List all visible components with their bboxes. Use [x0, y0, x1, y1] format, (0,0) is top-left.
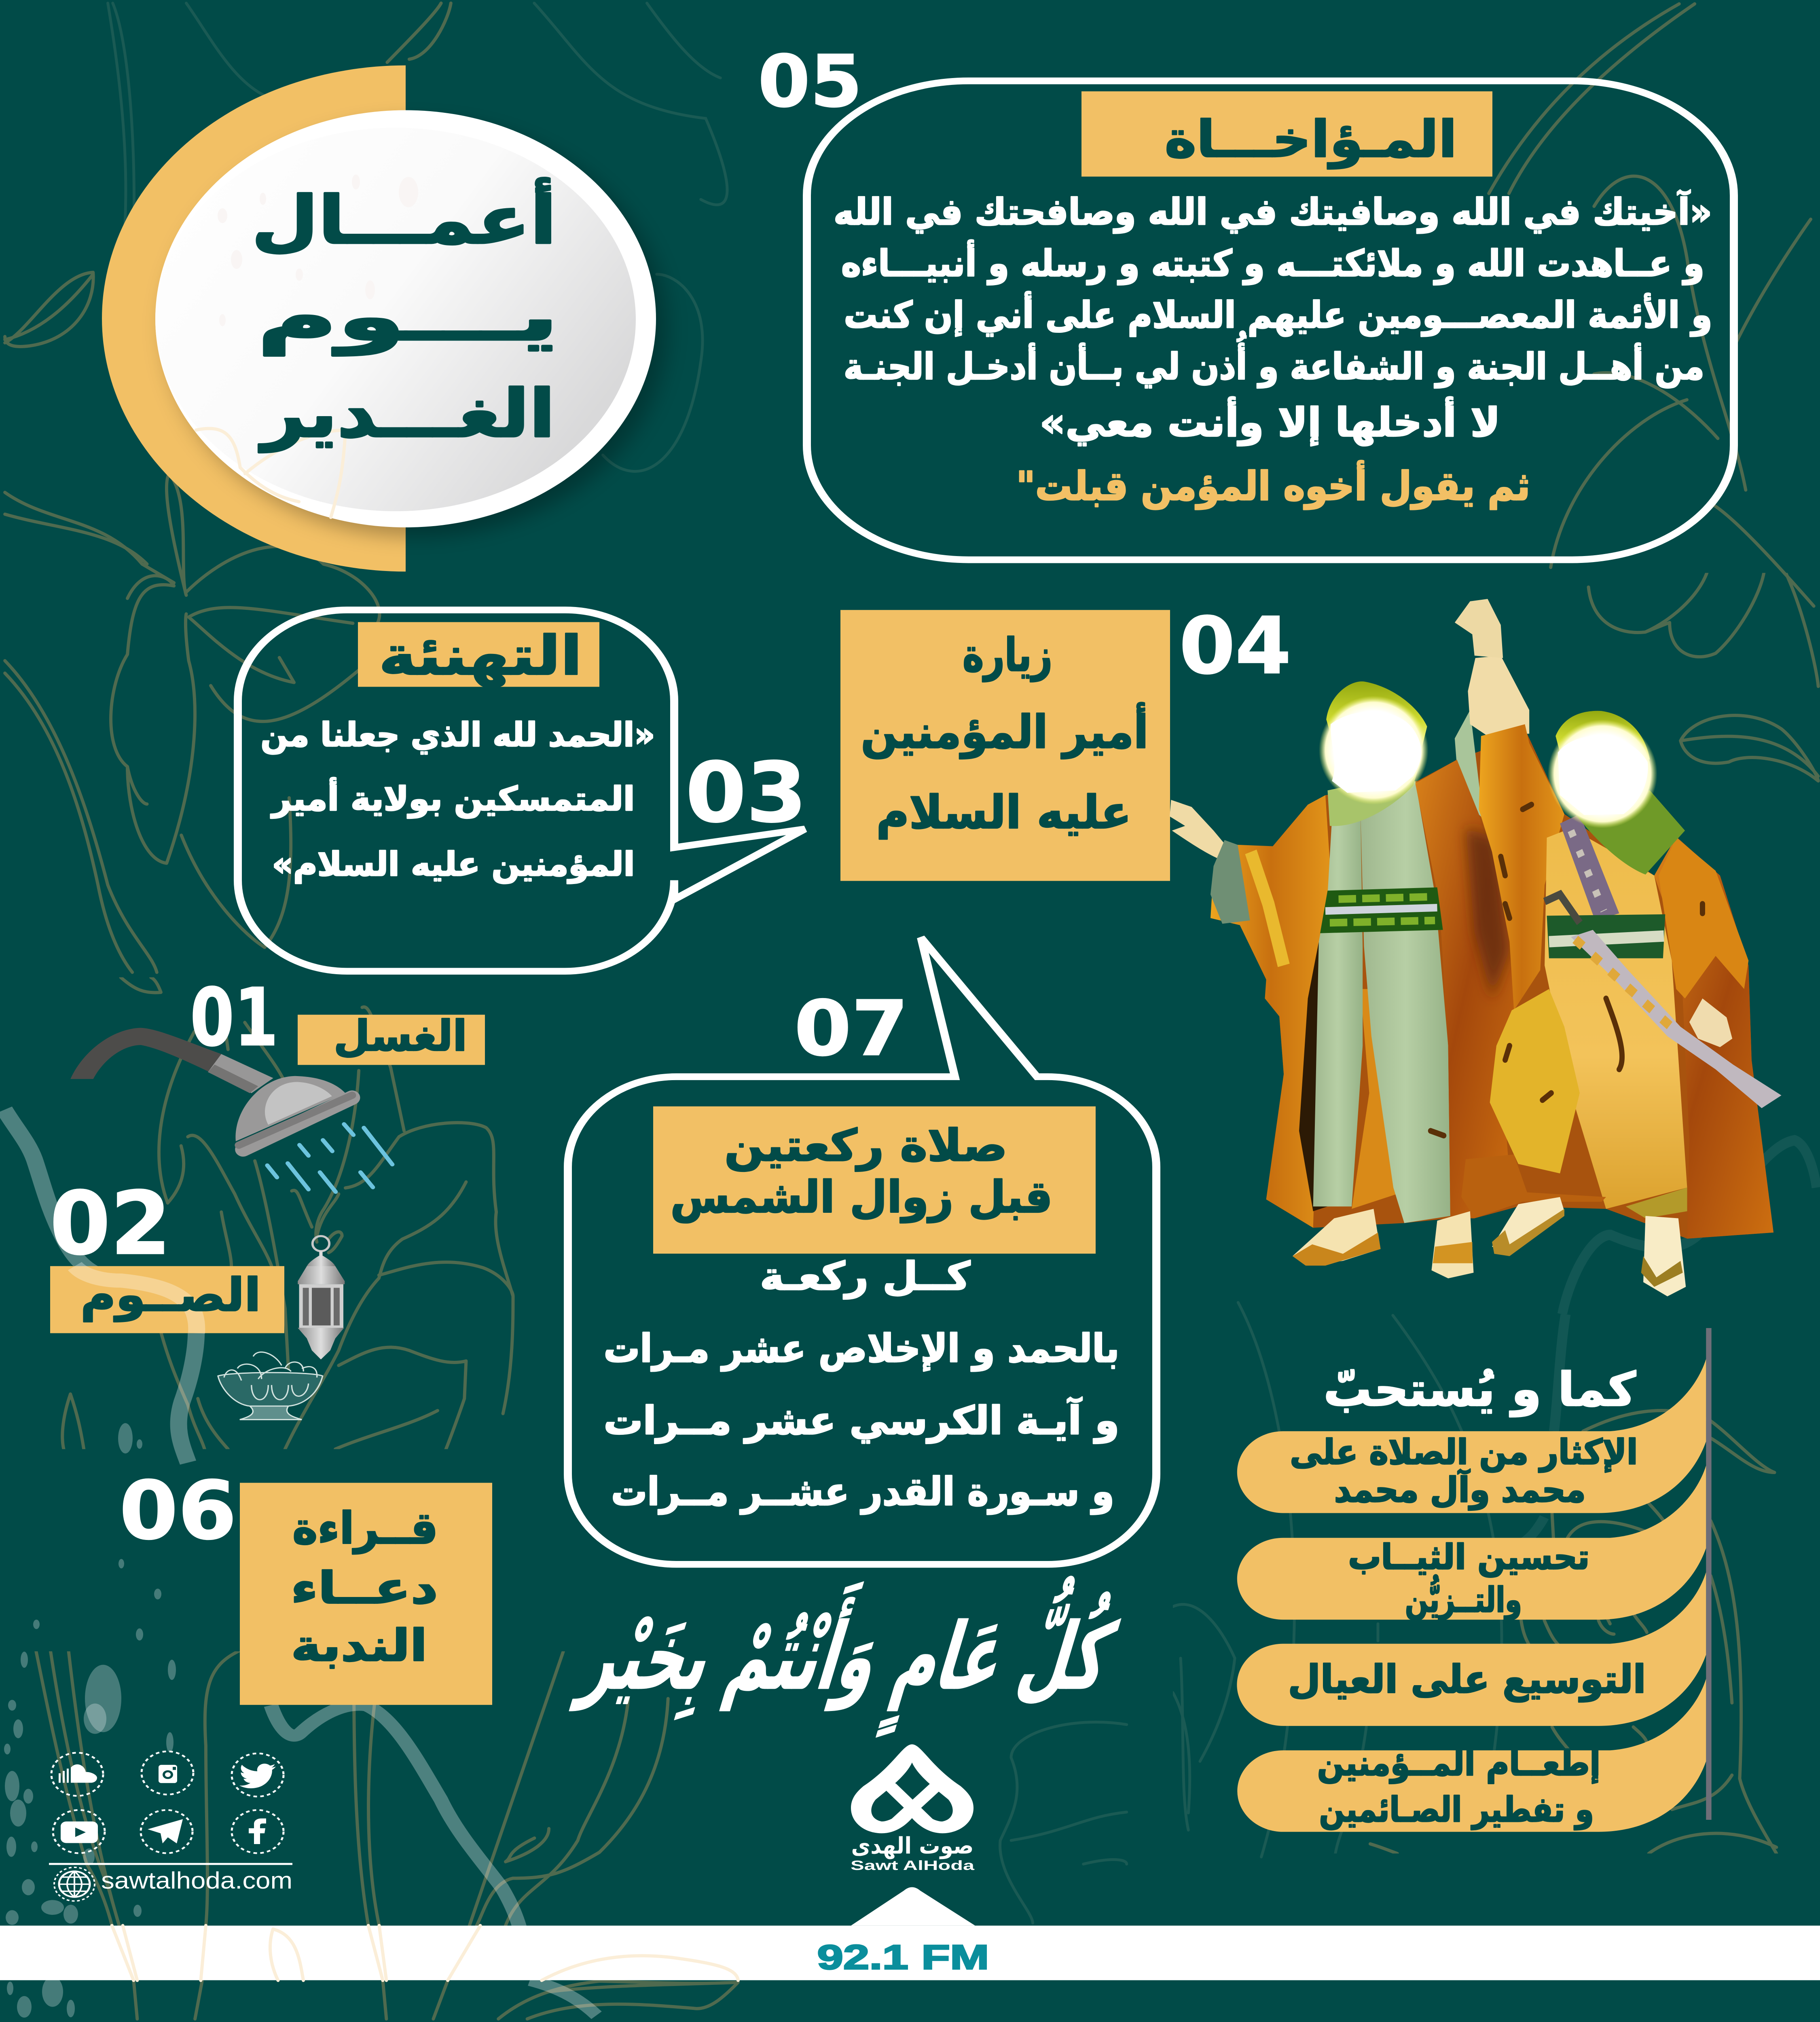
icon: lantern	[298, 1236, 345, 1360]
left sash	[1320, 887, 1443, 933]
pill 3	[1237, 1572, 1706, 1726]
heading line 1: صلاة ركعتين	[724, 1120, 1007, 1171]
speech bubble	[568, 937, 1156, 1564]
background line art: bottom stems	[36, 1651, 1127, 2019]
background line art: right leaves	[1562, 573, 1818, 1314]
icon: instagram	[142, 1751, 193, 1795]
pill 2	[1237, 1466, 1706, 1620]
raised arm	[1468, 656, 1529, 736]
left figure scarf	[1327, 772, 1418, 826]
pill 4 text b: و تفطير الصـائمين	[1319, 1790, 1594, 1830]
heading: كما و يُستحبّ	[1324, 1362, 1636, 1417]
pill 3 text: التوسيع على العيال	[1288, 1657, 1646, 1702]
yellow robe	[1545, 828, 1687, 1209]
sash stripe	[1325, 907, 1437, 911]
left face	[1331, 711, 1421, 793]
disc shadow	[166, 120, 667, 537]
reply line: ثم يقول أخوه المؤمن قبلت"	[1016, 460, 1530, 510]
pill 4	[1237, 1679, 1706, 1832]
left turban	[1326, 681, 1427, 748]
water drops	[267, 1124, 392, 1192]
website	[54, 1867, 292, 1901]
title medallion	[102, 66, 667, 571]
item 06: nudba supplication	[240, 1483, 492, 1705]
translucent ribbon	[4, 1110, 597, 2015]
number 03: 03	[686, 745, 807, 841]
rim shade	[239, 1095, 352, 1145]
line 1: زيارة	[963, 629, 1052, 681]
robe hem	[1461, 1155, 1606, 1218]
heading box	[1081, 91, 1492, 177]
line 2: أمير المؤمنين	[861, 702, 1148, 759]
gold label	[50, 1266, 284, 1333]
disc cream lines	[196, 429, 345, 517]
number 06: 06	[119, 1464, 237, 1557]
white band	[0, 1926, 1820, 1980]
paint splatter	[4, 1423, 176, 2018]
sword ornaments	[1575, 939, 1676, 1032]
right face glow	[1548, 719, 1657, 828]
pill 1 text a: الإكثار من الصلاة على	[1290, 1432, 1638, 1473]
title line 2: يـــوم	[257, 279, 559, 356]
shower head dome	[235, 1076, 345, 1141]
line 2: دعــاء	[291, 1563, 438, 1614]
pill 4 text a: إطعــام المــؤمنين	[1317, 1743, 1600, 1784]
connector shade	[208, 1064, 258, 1093]
divider	[49, 1863, 292, 1865]
panel 07: prayer	[568, 937, 1156, 1564]
icon: soundcloud	[51, 1753, 103, 1796]
icon: globe	[54, 1868, 95, 1901]
line 3: عليه السلام	[876, 786, 1132, 840]
leather strap	[1560, 814, 1619, 920]
logo Arabic name: صوت الهدى	[851, 1832, 973, 1859]
background line art: upper left lily	[5, 3, 727, 972]
label text: الغسل	[334, 1012, 467, 1061]
title line 1: أعمـــال	[252, 178, 557, 259]
pale green robe right	[1361, 781, 1450, 1223]
gold heading box	[653, 1106, 1096, 1254]
panel 05: brotherhood	[807, 81, 1734, 560]
item 02: fasting	[50, 1266, 284, 1333]
cuff	[1211, 840, 1250, 924]
title line 3: الغـــدير	[258, 376, 555, 453]
cream line art on band	[112, 1925, 738, 1980]
right sleeve	[1659, 838, 1748, 998]
trouser right	[1626, 1188, 1687, 1218]
footer band	[0, 1887, 1820, 1980]
number 04: 04	[1179, 601, 1291, 692]
calligraphy greeting: كُلُّ عَامٍ وَأَنْتُمْ بِخَيْر	[561, 1576, 1134, 1737]
line 3: الندبة	[291, 1620, 427, 1671]
shower rim	[243, 1098, 352, 1149]
sword hilt	[1545, 895, 1580, 923]
white triangle	[851, 1887, 975, 1926]
item 01 and 02 icons	[70, 1028, 392, 1419]
robe dark fold	[1466, 828, 1509, 998]
label text: الصــوم	[80, 1269, 261, 1322]
gold label	[298, 1015, 485, 1065]
icon: facebook	[232, 1810, 284, 1853]
right sandal	[1641, 1256, 1683, 1287]
second foot	[1431, 1211, 1473, 1278]
line 4: و سـورة القدر عشــر مــرات	[611, 1469, 1114, 1514]
line 1: «الحمد لله الذي جعلنا من	[260, 716, 655, 754]
line 2: المتمسكين بولاية أمير	[271, 777, 635, 818]
dome highlight	[265, 1082, 332, 1125]
ribbon over label	[75, 1266, 197, 1333]
panel 04: pilgrimage	[840, 610, 1170, 881]
left robe right panel	[1415, 760, 1516, 1218]
speech bubble	[238, 610, 805, 971]
background line art: centre lily	[62, 977, 513, 1449]
line 1: كــل ركعـة	[760, 1254, 970, 1299]
shower connector	[208, 1054, 273, 1093]
number 02: 02	[50, 1174, 171, 1275]
social icons	[51, 1751, 284, 1853]
grey gradient disc	[155, 128, 636, 511]
item 01: ghusl	[298, 1012, 485, 1065]
fold shadows	[1431, 805, 1702, 1136]
line 3: المؤمنين عليه السلام»	[272, 845, 635, 884]
fist	[1455, 599, 1503, 658]
logo mark	[851, 1744, 973, 1833]
icon: twitter	[232, 1753, 284, 1796]
right face	[1558, 736, 1648, 815]
left face glow	[1319, 696, 1428, 805]
pill 2 text a: تحسين الثيــاب	[1348, 1537, 1589, 1577]
heading box	[358, 622, 599, 687]
orange under robe	[1352, 989, 1402, 1209]
line 3: و آيـة الكرسي عشر مــرات	[604, 1397, 1120, 1443]
url: sawtalhoda.com	[101, 1867, 292, 1894]
backing silhouette	[1266, 734, 1773, 1239]
line 2: بالحمد و الإخلاص عشر مـرات	[604, 1326, 1120, 1372]
gold box	[840, 610, 1170, 881]
sleeve embroidery	[1251, 852, 1284, 965]
second sandal	[1433, 1242, 1473, 1263]
sash band	[1549, 936, 1664, 942]
disc speckles	[218, 175, 418, 326]
gold crescent	[102, 66, 406, 571]
left feet	[1293, 1209, 1380, 1266]
vertical bar	[1706, 1328, 1712, 1820]
number 07: 07	[794, 985, 908, 1073]
logo: Sawt AlHoda	[851, 1744, 975, 1873]
left hand	[1170, 800, 1225, 861]
icon: telegram	[141, 1810, 193, 1853]
right foot	[1643, 1216, 1686, 1297]
icon: youtube	[53, 1810, 105, 1853]
pill 1 text b: محمد وآل محمد	[1334, 1469, 1586, 1510]
pill 1	[1237, 1359, 1706, 1513]
panel 03: congratulation	[238, 610, 805, 971]
gold box	[240, 1483, 492, 1705]
pill 2 text b: والتــزيُّن	[1405, 1575, 1522, 1620]
sash highlights	[1330, 897, 1435, 923]
frequency: 92.1 FM	[817, 1938, 989, 1976]
icon: bowl of dates	[218, 1352, 323, 1419]
bent sandal	[1492, 1209, 1564, 1256]
yellow trousers	[1490, 989, 1580, 1174]
heading line 2: قبل زوال الشمس	[671, 1172, 1053, 1223]
pale sleeve behind arm	[1455, 710, 1483, 819]
number 05: 05	[758, 40, 862, 123]
right robe rear	[1654, 837, 1773, 1239]
left robe	[1211, 795, 1332, 1228]
strap studs	[1571, 831, 1604, 911]
right sash	[1547, 914, 1665, 958]
right hand	[1689, 998, 1732, 1047]
recommended acts panel	[1237, 1328, 1712, 1832]
illustration: two robed figures	[1170, 599, 1782, 1297]
right scarf	[1575, 791, 1685, 875]
background line art: right flower	[1238, 4, 1814, 1857]
logo Latin name: Sawt AlHoda	[851, 1858, 975, 1873]
white disc	[155, 110, 656, 527]
heading: المـؤاخـــاة	[1165, 110, 1457, 169]
raised sleeve	[1479, 724, 1564, 1010]
background line art: lower right leaves	[1173, 1314, 1776, 1853]
bubble outline	[807, 81, 1734, 560]
bent foot	[1492, 1197, 1564, 1254]
right turban	[1555, 711, 1650, 760]
sword	[1571, 930, 1782, 1108]
icon: shower hose	[70, 1028, 221, 1079]
heading: التهنئة	[379, 624, 582, 687]
pale green robe left	[1313, 809, 1363, 1206]
left sandal	[1293, 1233, 1381, 1266]
number 01: 01	[190, 971, 278, 1064]
line 1: قــراءة	[292, 1503, 438, 1554]
body line 5: لا أدخلها إلا وأنت معي»	[1039, 397, 1500, 446]
dark robe interior	[1299, 942, 1327, 1211]
